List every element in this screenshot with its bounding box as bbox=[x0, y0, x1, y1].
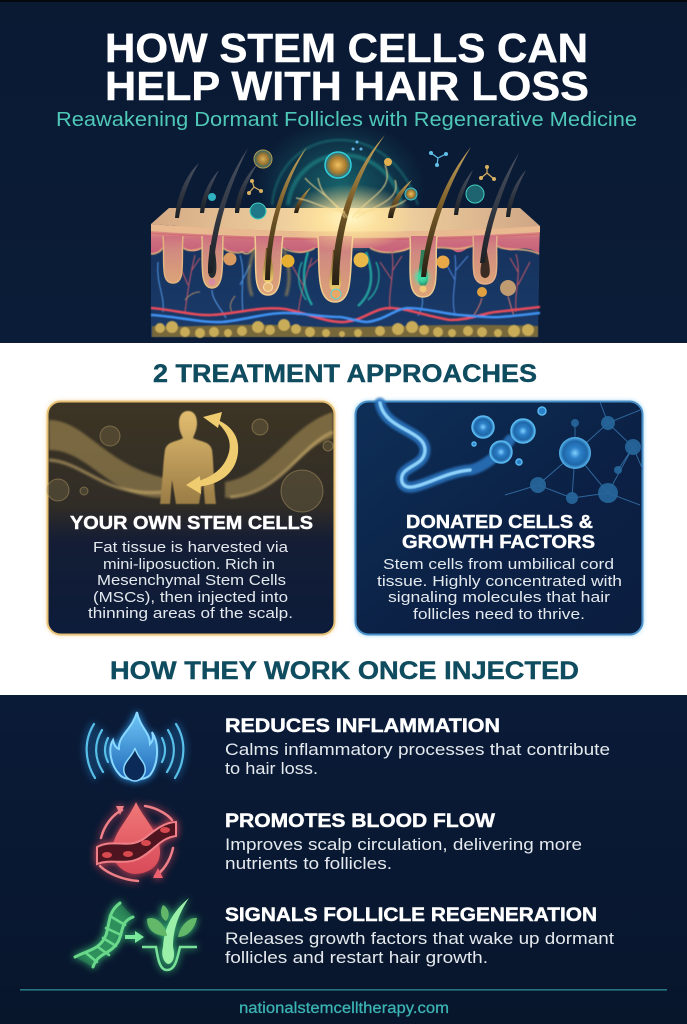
card body: Fat tissue is harvested via bbox=[93, 539, 289, 556]
follicle 1 bbox=[163, 236, 183, 283]
item description: Improves scalp circulation, delivering more bbox=[225, 836, 582, 854]
item description bbox=[225, 930, 614, 967]
footer website: nationalstemcelltherapy.com bbox=[239, 1000, 449, 1017]
card body bbox=[88, 539, 293, 622]
follicle 4 main bbox=[318, 236, 353, 302]
item heading: REDUCES INFLAMMATION bbox=[225, 716, 500, 737]
icon: blood drop and vessel bbox=[97, 802, 176, 881]
floating stem cells bbox=[208, 150, 484, 219]
card title: GROWTH FACTORS bbox=[402, 531, 595, 552]
fat layer bbox=[152, 319, 538, 338]
item: signals follicle regeneration bbox=[75, 898, 614, 970]
card body: tissue. Highly concentrated with bbox=[377, 573, 622, 590]
follicle 6 dark bbox=[473, 236, 497, 284]
teal energy glow bbox=[255, 120, 425, 250]
illustration: skin cross-section with hair follicles bbox=[151, 120, 540, 338]
heading: how they work: HOW THEY WORK ONCE INJECTED bbox=[110, 657, 579, 685]
item description: Calms inflammatory processes that contribute bbox=[225, 741, 610, 759]
capillaries bbox=[158, 252, 530, 318]
card body: follicles need to thrive. bbox=[413, 606, 585, 623]
central bright glow bbox=[286, 184, 414, 252]
item description: Releases growth factors that wake up dormant bbox=[225, 930, 614, 948]
title: HOW STEM CELLS CAN bbox=[105, 25, 588, 71]
icon: DNA to sprouting follicle bbox=[75, 898, 197, 970]
item heading: PROMOTES BLOOD FLOW bbox=[225, 811, 495, 832]
panel: your own stem cells bbox=[47, 401, 335, 635]
heading: treatment approaches: 2 TREATMENT APPROACHES bbox=[153, 360, 537, 388]
skin block bbox=[151, 208, 540, 337]
follicle 5 green bbox=[410, 236, 437, 297]
blood vessels bbox=[151, 307, 540, 322]
icon: human silhouette bbox=[160, 411, 216, 504]
gold wave wisps bbox=[49, 412, 333, 498]
golden energy wisps bbox=[296, 165, 406, 218]
card body: signaling molecules that hair bbox=[388, 589, 610, 606]
card title: DONATED CELLS & bbox=[406, 511, 593, 532]
item heading: SIGNALS FOLLICLE REGENERATION bbox=[225, 905, 597, 926]
background cells bbox=[47, 419, 333, 512]
hair shafts bbox=[175, 135, 526, 285]
card body: (MSCs), then injected into bbox=[93, 589, 288, 606]
icon: circular arrow bbox=[186, 412, 238, 494]
umbilical cord ribbon bbox=[380, 403, 510, 487]
white middle section bbox=[0, 343, 687, 695]
item description bbox=[225, 836, 582, 873]
card body bbox=[377, 556, 622, 623]
card body: Mesenchymal Stem Cells bbox=[97, 572, 286, 589]
panel: donated cells and growth factors bbox=[355, 401, 643, 635]
icon: blue flame with waves bbox=[87, 712, 183, 781]
item description: to hair loss. bbox=[225, 760, 318, 778]
follicle 3 gold bbox=[249, 250, 289, 296]
subtitle: Reawakening Dormant Follicles with Regenerative Medicine bbox=[56, 109, 637, 131]
card title: YOUR OWN STEM CELLS bbox=[70, 512, 313, 533]
floating molecules bbox=[247, 140, 496, 195]
signaling network bbox=[505, 402, 643, 505]
title bbox=[105, 25, 589, 109]
item description: follicles and restart hair growth. bbox=[225, 949, 488, 967]
title: HELP WITH HAIR LOSS bbox=[105, 63, 589, 109]
bottom dark section bbox=[0, 695, 687, 1024]
card body: thinning areas of the scalp. bbox=[88, 605, 293, 622]
item description: nutrients to follicles. bbox=[225, 855, 392, 873]
top header background bbox=[0, 0, 687, 343]
card body: mini-liposuction. Rich in bbox=[103, 556, 275, 573]
card title bbox=[402, 511, 595, 552]
floating cells bbox=[472, 407, 546, 465]
follicles bbox=[163, 236, 516, 306]
follicle 2 dark bbox=[202, 236, 223, 288]
item description bbox=[225, 741, 610, 778]
item: promotes blood flow bbox=[97, 802, 582, 881]
item: reduces inflammation bbox=[87, 712, 610, 781]
teal swirl around main follicle bbox=[299, 252, 379, 306]
card body: Stem cells from umbilical cord bbox=[383, 556, 614, 573]
